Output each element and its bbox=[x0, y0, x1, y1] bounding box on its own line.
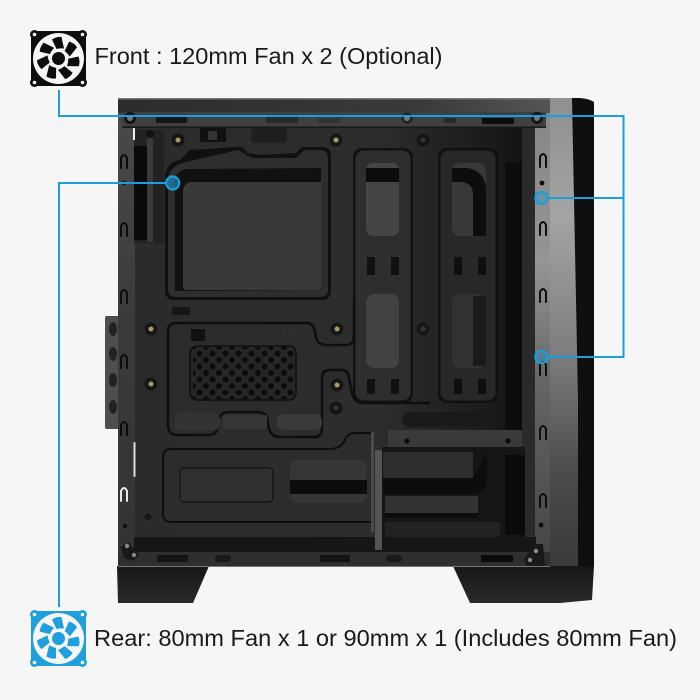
icon: blue rear fan bbox=[30, 610, 87, 667]
callout line: rear fan bbox=[59, 176, 179, 607]
memory column two bbox=[438, 148, 498, 403]
corner screws bbox=[121, 112, 545, 566]
expansion slot plate bbox=[105, 316, 119, 429]
rear fan bbox=[133, 128, 164, 243]
lower bay bbox=[382, 447, 525, 537]
mesh strip bbox=[505, 163, 522, 433]
upper motherboard cutout bbox=[165, 147, 331, 300]
memory column one bbox=[353, 148, 413, 403]
vertical supports bbox=[371, 432, 382, 550]
right rail bbox=[522, 98, 550, 567]
upper small clips bbox=[172, 128, 287, 315]
front panel bbox=[550, 98, 594, 566]
right rail hooks bbox=[540, 154, 546, 507]
right foot and front base bbox=[453, 566, 594, 603]
bottom bar bbox=[118, 537, 550, 567]
standoffs bbox=[144, 134, 430, 520]
callout lines: front fans bbox=[59, 90, 624, 363]
computer case bbox=[105, 98, 594, 603]
drive bracket bbox=[388, 412, 522, 447]
lower panel bbox=[163, 433, 372, 522]
ventilation grille bbox=[190, 346, 296, 400]
icon: black front fan bbox=[30, 30, 87, 87]
embossed lower motherboard region bbox=[168, 300, 430, 437]
left foot bbox=[117, 566, 209, 603]
lower recesses bbox=[175, 329, 322, 430]
rail holes bbox=[122, 181, 544, 528]
left rail bbox=[118, 98, 135, 567]
left rail hooks bbox=[121, 155, 134, 501]
top bar bbox=[118, 98, 550, 128]
interior back wall bbox=[134, 112, 536, 554]
rear fan label: Rear: 80mm Fan x 1 or 90mm x 1 (Includes 80mm Fan) bbox=[94, 625, 677, 651]
front fan label: Front : 120mm Fan x 2 (Optional) bbox=[94, 43, 442, 69]
